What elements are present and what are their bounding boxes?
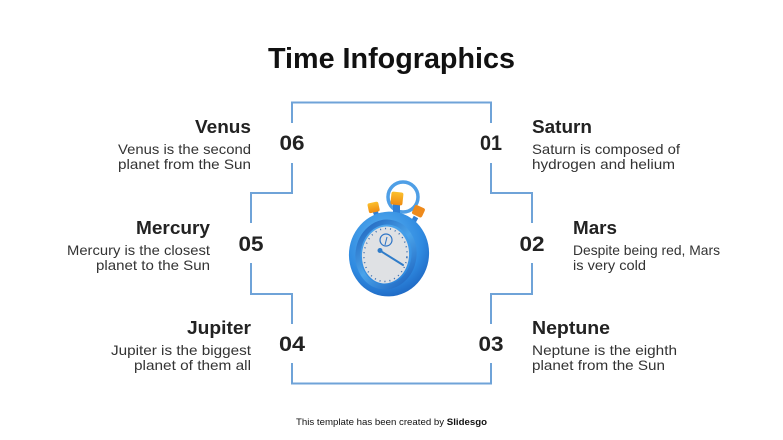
step 04: Jupiter: Jupiter is the biggest [111, 342, 251, 358]
step 06: Venus: 06 [280, 132, 304, 155]
title: Time Infographics [268, 43, 515, 75]
step 01: Saturn: hydrogen and helium [532, 156, 675, 172]
step 05: Mercury [67, 218, 264, 273]
step 03: Neptune: 03 [478, 333, 504, 356]
step 06: Venus [118, 117, 304, 172]
step 03: Neptune: Neptune [532, 318, 610, 338]
step 05: Mercury: 05 [238, 233, 264, 256]
step 03: Neptune [478, 318, 677, 373]
step 05: Mercury: Mercury [136, 218, 210, 238]
step 06: Venus: Venus is the second [118, 141, 251, 157]
gold buttons [367, 201, 380, 213]
step 01: Saturn [480, 117, 680, 172]
step 05: Mercury: planet to the Sun [96, 257, 210, 273]
step 04: Jupiter: 04 [279, 333, 305, 356]
step 02: Mars [520, 218, 720, 273]
step 01: Saturn: Saturn [532, 117, 592, 137]
step 01: Saturn: 01 [480, 132, 502, 155]
icon: stopwatch [342, 182, 436, 303]
step 06: Venus: Venus [195, 117, 251, 137]
top stem [393, 204, 400, 214]
step 04: Jupiter: planet of them all [134, 357, 251, 373]
step 04: Jupiter: Jupiter [187, 318, 251, 338]
step 01: Saturn: Saturn is composed of [532, 141, 680, 157]
step 02: Mars: Mars [573, 218, 617, 238]
footer credit: This template has been created by Slidesgo [296, 417, 487, 428]
step 04: Jupiter [111, 318, 305, 373]
step 02: Mars: Despite being red, Mars [573, 242, 720, 258]
step 06: Venus: planet from the Sun [118, 156, 251, 172]
step 03: Neptune: planet from the Sun [532, 357, 665, 373]
step 03: Neptune: Neptune is the eighth [532, 342, 677, 358]
step 02: Mars: is very cold [573, 257, 646, 273]
hand [379, 250, 403, 265]
side stems [375, 211, 416, 226]
connector path [251, 102, 532, 384]
dial ticks [361, 226, 410, 284]
subdial [380, 234, 392, 246]
dial face [359, 224, 412, 286]
step 02: Mars: 02 [520, 233, 544, 256]
case [342, 205, 436, 303]
step 05: Mercury: Mercury is the closest [67, 242, 210, 258]
top ring [388, 182, 418, 212]
